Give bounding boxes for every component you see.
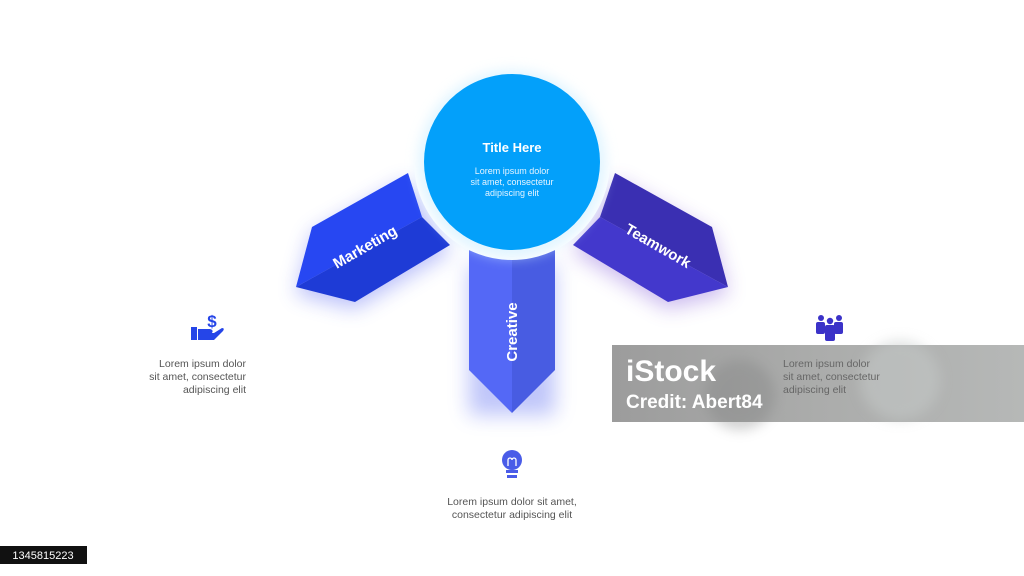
text: marketing (149, 358, 247, 396)
id label: 1345815223 (12, 550, 74, 562)
watermark: iStock (626, 355, 716, 388)
center text: Lorem ipsum dolor (475, 166, 549, 176)
text: teamwork: adipiscing elit (783, 384, 846, 396)
halo (414, 64, 610, 260)
text: marketing: sit amet, consectetur (149, 371, 247, 383)
icon: people (816, 315, 843, 341)
icon: money hand (191, 312, 224, 340)
label: teamwork: Teamwork (622, 221, 694, 272)
center circle: sit amet, consectetur (470, 177, 554, 187)
center circle: adipiscing elit (485, 188, 540, 198)
label: creative: Creative (504, 302, 521, 362)
watermark: Credit: Abert84 (626, 392, 763, 413)
arrow: creative (469, 250, 555, 413)
icon: money hand: $ (207, 312, 217, 331)
title: Title Here (482, 140, 542, 155)
label: marketing: Marketing (330, 222, 400, 273)
text: creative (447, 496, 577, 521)
text: teamwork: Lorem ipsum dolor (783, 358, 870, 370)
text: marketing: Lorem ipsum dolor (159, 358, 247, 370)
text: teamwork (783, 358, 880, 396)
center circle (424, 74, 600, 250)
id label (0, 546, 87, 564)
text: marketing: adipiscing elit (183, 384, 246, 396)
arrow: marketing (296, 173, 450, 302)
text: teamwork: sit amet, consectetur (783, 371, 880, 383)
text: creative: consectetur adipiscing elit (452, 509, 572, 521)
glow shadows (296, 180, 728, 415)
arrow: teamwork (573, 173, 728, 302)
watermark (612, 340, 1024, 430)
text: creative: Lorem ipsum dolor sit amet, (447, 496, 577, 508)
icon: lightbulb (502, 450, 522, 478)
